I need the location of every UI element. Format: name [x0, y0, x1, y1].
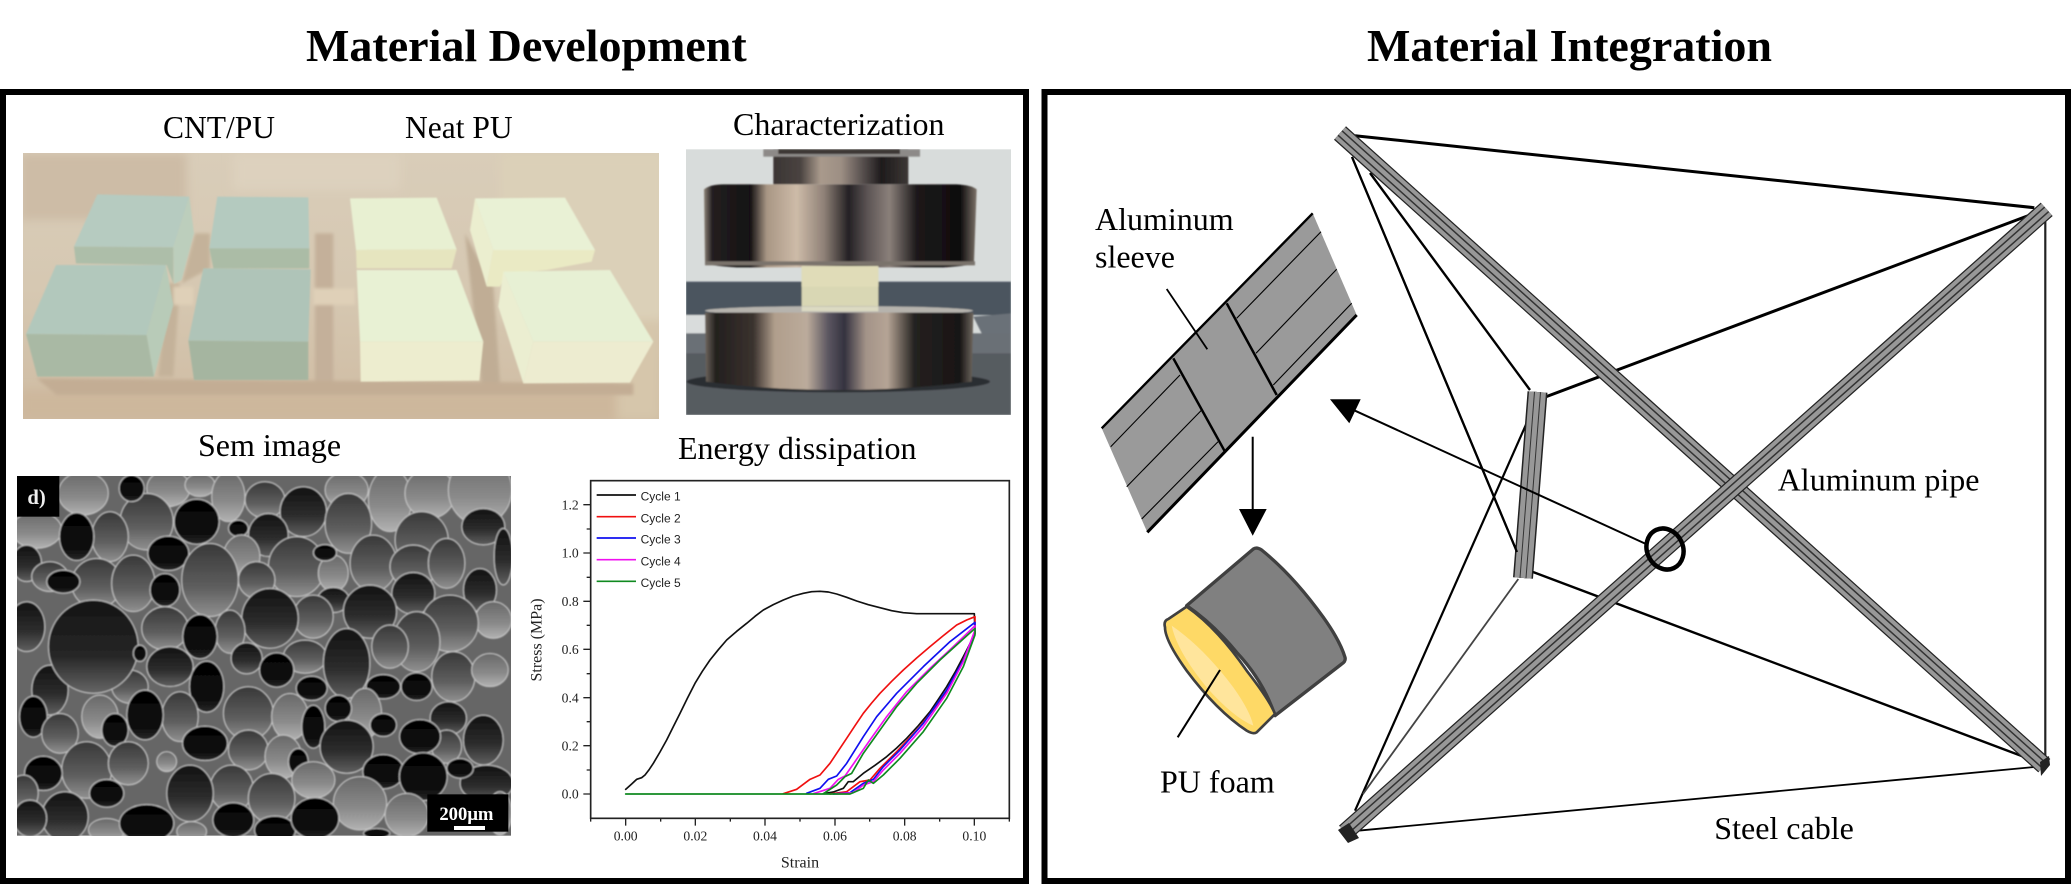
label: CNT/PU: CNT/PU [163, 110, 275, 145]
upper shaft [773, 149, 908, 184]
foam-filled cylinder [1165, 548, 1345, 737]
upper disc [704, 184, 977, 267]
curve: cycle 4 [813, 626, 975, 794]
label: Aluminum sleeve: sleeve [1095, 238, 1175, 274]
y axis numbers: 0.8 [562, 594, 579, 609]
curves [626, 591, 975, 794]
aluminum pipe: central strut [1523, 392, 1538, 578]
legend [597, 490, 681, 590]
x axis numbers: 0.02 [683, 828, 707, 843]
label: Neat PU: Neat PU [405, 110, 513, 145]
legend: Cycle 3 [641, 533, 681, 547]
down arrow [1239, 437, 1267, 536]
chart: stress-strain energy dissipation [529, 481, 1009, 872]
title: Material Development: Material Development [306, 20, 747, 71]
x axis numbers [614, 828, 986, 843]
foam specimen [802, 266, 878, 310]
y axis title: Stress (MPa) [529, 598, 546, 682]
PU foam face [1165, 607, 1275, 733]
highlight circle on pipe [1640, 522, 1690, 576]
scale bar: 200 µm: 200μm [439, 804, 494, 825]
foam leader [1178, 670, 1220, 737]
curve: cycle 3 [807, 622, 975, 794]
steel cables [1352, 136, 2045, 831]
pointer arrow to sleeve [1330, 399, 1646, 544]
aluminum sleeve drawing [1102, 213, 1357, 532]
panel tag: d) [17, 476, 59, 517]
label: Energy dissipation: Energy dissipation [678, 430, 916, 466]
neat PU blocks [350, 198, 457, 250]
x axis numbers: 0.10 [962, 828, 986, 843]
x axis numbers: 0.08 [893, 828, 917, 843]
label: Aluminum pipe: Aluminum pipe [1778, 462, 1979, 498]
label: Sem image: Sem image [198, 427, 341, 463]
background cables and base [686, 282, 1011, 315]
label: Characterization: Characterization [733, 106, 944, 142]
label: Aluminum sleeve: Aluminum [1095, 201, 1234, 237]
label: Steel cable: Steel cable [1714, 810, 1854, 846]
legend: Cycle 5 [641, 576, 681, 590]
y axis numbers: 1.0 [562, 546, 579, 561]
curve: cycle 5 [626, 628, 975, 794]
curve: cycle 2 [783, 617, 975, 794]
CNT/PU blocks [74, 194, 189, 247]
y axis numbers: 1.2 [562, 497, 579, 512]
y axis numbers: 0.2 [562, 738, 579, 753]
pipe end node [1338, 823, 1359, 843]
x axis numbers: 0.00 [614, 828, 638, 843]
aluminum pipe: top-left to bottom-right [1340, 133, 2044, 766]
legend: Cycle 4 [641, 554, 681, 568]
SEM image [8, 455, 513, 844]
legend: Cycle 1 [641, 490, 681, 504]
cylinder body [1187, 548, 1345, 716]
shadows between blocks [315, 233, 333, 382]
y axis numbers: 0.4 [562, 690, 579, 705]
scale bar: 200 µm [427, 794, 508, 832]
panel: material integration [1044, 92, 2068, 881]
aluminum pipe: bottom-left to top-right [1345, 209, 2047, 832]
x axis numbers: 0.06 [823, 828, 847, 843]
panel: material development [3, 92, 1026, 881]
title: Material Integration: Material Integration [1367, 20, 1772, 71]
x axis title: Strain [781, 855, 819, 872]
lower disc [705, 306, 973, 315]
panel tag: d): d) [27, 487, 46, 509]
foam highlight [1172, 626, 1253, 726]
pipe end node [2040, 756, 2050, 776]
photo: compression test fixture [686, 149, 1011, 415]
label: PU foam: PU foam [1160, 763, 1275, 799]
plot frame and ticks [583, 481, 1009, 826]
curve: cycle 1 [626, 591, 975, 794]
y axis numbers: 0.0 [562, 787, 579, 802]
cable crossing the strut [1352, 157, 1517, 552]
y axis numbers [562, 497, 579, 802]
legend: Cycle 2 [641, 511, 681, 525]
x axis numbers: 0.04 [753, 828, 777, 843]
y axis numbers: 0.6 [562, 642, 579, 657]
photo: foam samples [20, 153, 667, 420]
